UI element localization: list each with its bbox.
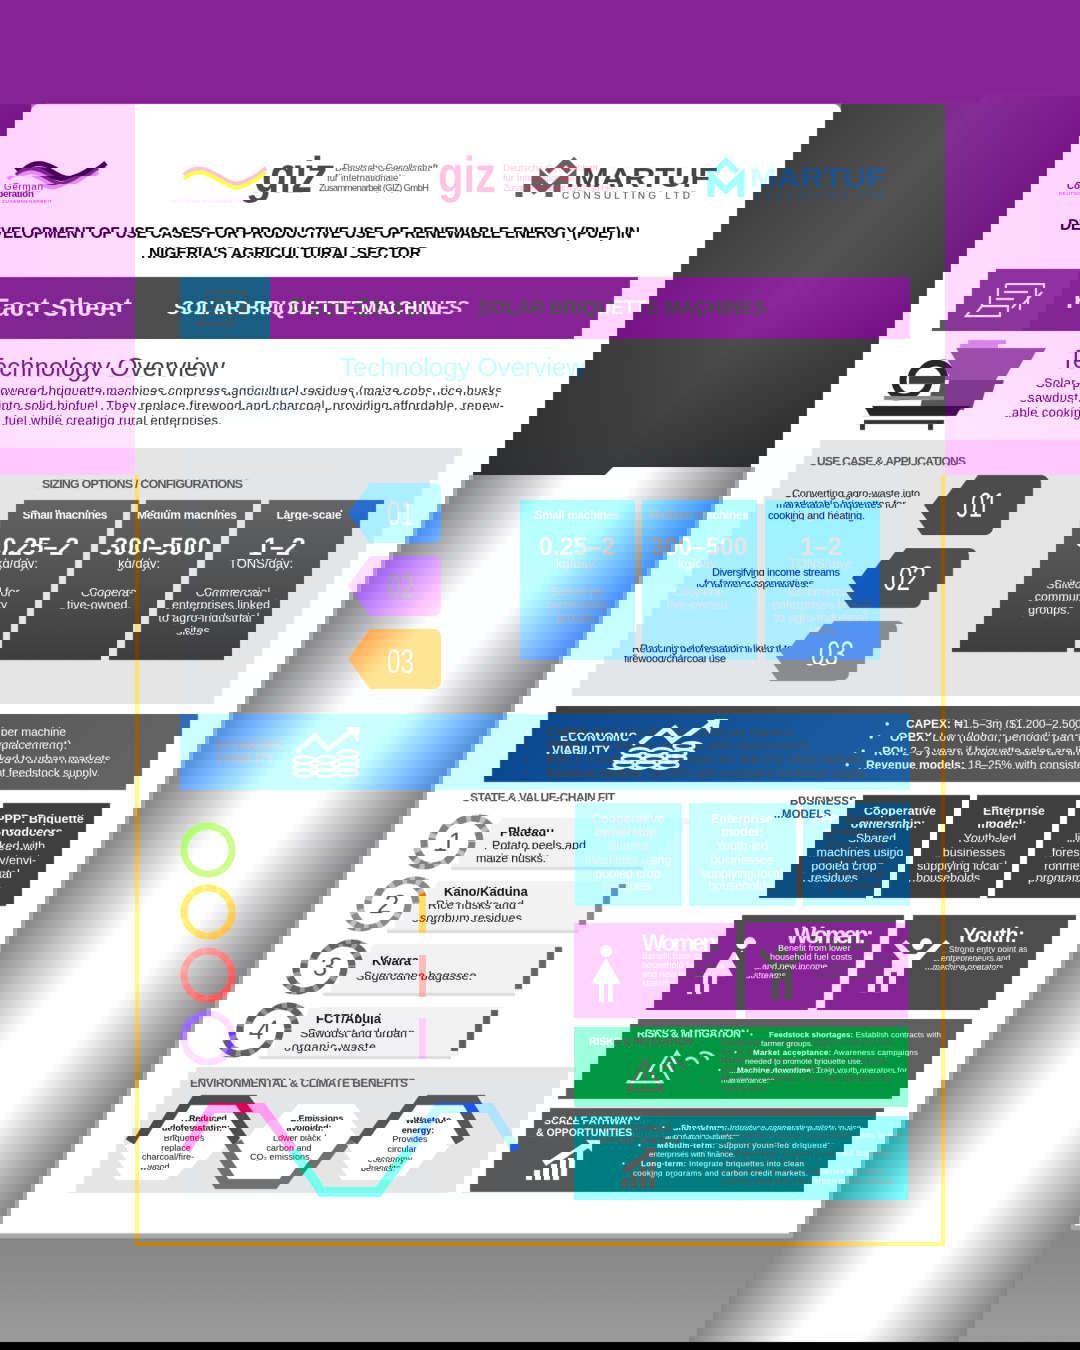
technology overview text: Solar-powered briquette machines compress agricultural residues (maize cobs, rice husks, — [340, 383, 890, 398]
title: NIGERIA'S AGRICULTURAL SECTOR — [397, 245, 669, 262]
use case 1 — [200, 483, 441, 543]
heading: SIZING OPTIONS / CONFIGURATIONS — [522, 477, 723, 491]
card: cooperative ownership: machines using — [585, 853, 671, 867]
header bar: fact sheet — [180, 277, 910, 339]
row: Plateau: Potato peels and — [252, 846, 346, 860]
row: FCT/Abuja: FCT/Abuja — [252, 1019, 318, 1034]
icon: coins and rising arrow — [294, 727, 360, 776]
hexagon: waste-to-energy: energy: — [450, 1133, 482, 1143]
panel: economic viability: VIABILITY — [216, 751, 274, 765]
icon: bars and arrow — [622, 1148, 656, 1188]
card: enterprise model: Youth-led — [716, 839, 768, 853]
icon: woman — [591, 945, 621, 1002]
bullet list: farmer groups. — [721, 1047, 773, 1056]
card: women: streams. — [642, 978, 677, 988]
hexagon: emissions avoided: CO₂ emissions. — [322, 1160, 384, 1170]
heading: MODELS — [510, 817, 560, 829]
card: large scale: to agro-industrial — [774, 611, 868, 625]
bullet list — [525, 725, 868, 780]
fact sheet heading: Fact Sheet — [290, 294, 429, 322]
logo: GIZ: giz — [438, 147, 496, 203]
bullet list: needed to promote briquette use. — [721, 1065, 839, 1074]
bullet list: • — [525, 725, 529, 739]
card: medium machines: 300–500 — [650, 533, 748, 561]
card: women: Benefit from lower — [642, 951, 715, 961]
panel: scale pathway and opportunities: & OPPORTUNITIES — [584, 1135, 680, 1147]
card: youth: entrepreneurs and — [813, 961, 883, 971]
card: large scale — [765, 500, 880, 660]
card: small machines: Suited for — [550, 585, 604, 599]
hexagon: waste-to-energy: circular — [451, 1152, 481, 1162]
panel: use case and sizing background — [180, 448, 910, 704]
hexagon: waste-to-energy: Waste-to- — [446, 1123, 486, 1133]
row: FCT/Abuja: organic waste — [252, 1048, 336, 1062]
bullet list: Revenue models: 18–25% with consistent feedstock supply. — [546, 766, 868, 780]
card: medium machines: tive-owned. — [667, 598, 731, 612]
bullet list — [702, 1131, 904, 1186]
use case 2: 02 — [387, 568, 414, 606]
row: FCT/Abuja: 4 — [201, 1023, 215, 1053]
card: cooperative ownership: Shared — [608, 839, 648, 853]
heading: USE CASE & APPLICATIONS — [193, 462, 342, 476]
icon: youth person — [758, 946, 806, 1000]
row: Kano/Kaduna: Kano/Kaduna — [252, 892, 337, 907]
card: enterprise model — [689, 803, 796, 906]
logo: Martuf Consulting — [711, 161, 886, 202]
machine name: SOLAR BRIQUETTE MACHINES — [478, 298, 766, 319]
card: PPP — [803, 803, 910, 906]
use case 2: Diversifying income streams — [200, 575, 328, 587]
card: large scale: Large-scale — [788, 508, 854, 522]
use case 3 — [200, 629, 441, 689]
use case 1: cooking and heating. — [200, 518, 297, 530]
row: Kwara: Sugarcane bagasse. — [252, 977, 368, 991]
title — [204, 225, 864, 262]
hexagon: emissions avoided: Lower black — [329, 1141, 378, 1151]
icon: document and pen — [198, 292, 250, 324]
card: PPP: linked with — [827, 839, 885, 853]
row: Kano/Kaduna — [184, 888, 427, 941]
hexagon: emissions avoided: Emissions — [330, 1121, 376, 1131]
card: women: and new income — [642, 969, 708, 979]
technology overview text — [340, 383, 904, 428]
bullet list: • — [702, 1056, 705, 1065]
bullet list: Feedstock shortages: Establish contracts with — [721, 1038, 893, 1047]
card: cooperative ownership: ownership: — [595, 825, 661, 839]
panel: scale pathway and opportunities — [574, 1116, 908, 1200]
bullet list: • — [702, 1074, 705, 1083]
row: Kwara: 3 — [201, 960, 215, 990]
bullet list — [702, 1038, 893, 1093]
hexagon: emissions avoided: avoided: — [334, 1131, 372, 1141]
card: PPP: ronmental — [828, 867, 884, 881]
bullet list: • — [702, 1167, 705, 1176]
hexagon: reduced deforestation: Briquettes — [220, 1141, 261, 1151]
bullet list: • — [702, 1149, 705, 1158]
card: large scale: Commercial — [788, 585, 854, 599]
row: Kwara: Kwara — [252, 961, 292, 976]
panel: business models — [510, 803, 910, 906]
panel: sizing options — [520, 477, 880, 660]
hexagon: reduced deforestation: charcoal/fire- — [214, 1160, 266, 1170]
bullet list: OPEX: Low (labour, periodic part replacement). — [546, 738, 811, 752]
panel: environmental and climate benefits — [180, 1075, 560, 1201]
panel: economic viability — [180, 714, 910, 790]
hexagon: reduced deforestation: Reduced — [221, 1121, 259, 1131]
hexagon: waste-to-energy — [409, 1108, 516, 1188]
row: Plateau: Plateau — [252, 832, 298, 847]
card: enterprise model: Enterprise — [711, 812, 773, 826]
white poster card — [135, 104, 945, 1246]
use case 1: marketable briquettes for — [200, 507, 322, 519]
bullet list: Market acceptance: Awareness campaigns — [721, 1056, 886, 1065]
hexagon: reduced deforestation — [186, 1108, 293, 1188]
card: youth: Youth: — [811, 932, 873, 955]
bullet list: CAPEX: ₦1.5–3m ($1,200–2,500) per machine — [546, 725, 794, 739]
card: cooperative ownership: pooled crop — [595, 867, 661, 881]
icon: warning triangle — [628, 1060, 684, 1090]
card: youth: Strong entry point as — [813, 952, 891, 962]
card: cooperative ownership: Cooperative — [592, 812, 664, 826]
card: small machines: Small machines — [534, 508, 620, 522]
card: cooperative ownership: residues. — [603, 879, 653, 893]
card: PPP: programs. — [828, 879, 884, 893]
logo: GIZ: Deutsche Gesellschaft — [503, 163, 598, 174]
card: PPP: producers — [825, 825, 887, 839]
card: medium machines: Coopera- — [673, 585, 725, 599]
bullet list: • — [702, 1038, 705, 1047]
card: large scale: sites — [808, 624, 834, 638]
technology overview text: able cooking fuel while creating rural enterprises. — [340, 413, 638, 428]
card: large scale: TONS/day; — [789, 556, 853, 571]
bullet list: • — [525, 752, 529, 766]
card: medium machines: Medium machines — [649, 508, 749, 522]
logo: GIZ: für Internationale — [503, 173, 574, 184]
panel: risks and mitigation — [574, 1027, 908, 1107]
heading: STATE & VALUE-CHAIN FIT — [182, 798, 328, 812]
card: youth: machine operators. — [813, 970, 886, 980]
bullet list: ROI: 2–3 years if briquette sales are linked to urban markets. — [546, 752, 866, 766]
use case 1: 01 — [387, 495, 414, 533]
hexagon: emissions avoided: carbon and — [330, 1151, 376, 1161]
logo: Martuf Consulting: CONSULTING LTD — [754, 191, 882, 202]
heading: ENVIRONMENTAL & CLIMATE BENEFITS — [190, 1084, 408, 1098]
bullet list: cooking programs and carbon credit markets. — [721, 1177, 896, 1186]
row: FCT/Abuja — [184, 1014, 427, 1067]
use case 2 — [200, 556, 441, 616]
card: youth — [745, 923, 908, 1018]
logo: German Cooperation: German — [188, 182, 227, 193]
row: Plateau — [184, 826, 427, 878]
use case 3: 03 — [387, 643, 414, 681]
use case 3: firewood/charcoal use — [200, 661, 302, 673]
bullet list: maintenance. — [721, 1084, 769, 1093]
hexagon: emissions avoided — [293, 1112, 409, 1192]
picture: briquette machine — [192, 348, 310, 438]
heading: RISKS & MITIGATION — [589, 1036, 693, 1048]
row: Plateau: maize husks. — [252, 859, 322, 873]
hexagon: waste-to-energy: Provides — [448, 1142, 484, 1152]
card: medium machines: kg/day; — [678, 556, 720, 571]
card: enterprise model: supplying local — [701, 867, 783, 881]
use case 2: for farmer cooperatives. — [200, 586, 313, 598]
technology overview heading: Technology Overview — [340, 352, 585, 382]
heading: ECONOMIC — [216, 738, 285, 752]
technology overview text: sawdust, into solid biofuel. They replace firewood and charcoal, providing affordable, renew- — [340, 398, 904, 413]
bullet list: Long-term: Integrate briquettes into clean — [721, 1167, 884, 1176]
heading: BUSINESS — [510, 804, 569, 816]
row: Kano/Kaduna: Rice husks and — [252, 906, 340, 920]
logo: GIZ: Zusammenarbeit (GIZ) GmbH — [503, 183, 613, 194]
logo: Martuf Consulting: MARTUF — [750, 163, 886, 193]
row: Plateau: 1 — [201, 835, 215, 865]
card: small machines: 0.25–2 — [539, 533, 615, 561]
card: large scale: enterprises linked — [772, 598, 870, 612]
card: PPP: forestry/envi- — [820, 853, 892, 867]
bullet list: Machine downtime: Train youth operators for — [721, 1074, 891, 1083]
row: Kwara — [184, 951, 427, 1004]
card: cooperative ownership — [575, 803, 682, 906]
hexagon: reduced deforestation: replace — [225, 1151, 255, 1161]
row: FCT/Abuja: Sawdust and urban — [252, 1034, 359, 1048]
logo: German Cooperation: Cooperation — [171, 189, 226, 200]
title: DEVELOPMENT OF USE CASES FOR PRODUCTIVE USE OF RENEWABLE ENERGY (PUE) IN — [204, 225, 864, 242]
bullet list: enterprises with finance. — [721, 1158, 807, 1167]
card: small machines: groups. — [556, 611, 598, 625]
bullet list: Medium-term: Support youth-led briquette — [721, 1149, 892, 1158]
heading — [510, 804, 569, 829]
card: small machines: kg/day; — [556, 556, 598, 571]
hexagon: waste-to-energy: economy — [448, 1162, 485, 1172]
hexagon: reduced deforestation: wood. — [227, 1170, 252, 1180]
use case 3: Reducing deforestation linked to — [200, 651, 353, 663]
hexagon: reduced deforestation: deforestation: — [210, 1131, 270, 1141]
card: enterprise model: businesses — [711, 853, 773, 867]
bullet list: Short-term: Introduce cooperative pilots in rice- — [721, 1131, 904, 1140]
card: small machines: community — [547, 598, 608, 612]
card: women: household fuel costs — [642, 960, 725, 970]
row: Kano/Kaduna: 2 — [201, 897, 215, 927]
panel: state and value-chain fit — [182, 798, 427, 1067]
bullet list: • — [525, 738, 529, 752]
card: large scale: 1–2 — [800, 533, 842, 561]
card: enterprise model: model: — [722, 825, 762, 839]
hexagon: waste-to-energy: benefits. — [449, 1171, 483, 1181]
card: small machines — [520, 500, 635, 660]
panel: use case and applications — [193, 462, 441, 689]
card: PPP: PPP: Briquette — [812, 812, 900, 826]
bullet list: • — [702, 1131, 705, 1140]
heading: SCALE PATHWAY — [584, 1123, 672, 1135]
row: Kano/Kaduna: sorghum residues — [252, 919, 354, 933]
card: medium machines — [642, 500, 757, 660]
card: women: Women: — [642, 930, 722, 957]
use case 1: Converting agro-waste into — [200, 496, 328, 508]
logo: German Cooperation — [171, 163, 266, 205]
bullet list: and maize clusters. — [721, 1140, 790, 1149]
bullet list: • — [525, 766, 529, 780]
card: women — [574, 923, 736, 1018]
logo: GIZ — [438, 147, 613, 203]
logo: German Cooperation: DEUTSCHE ZUSAMMENARBEIT — [171, 199, 252, 205]
card: enterprise model: households. — [708, 879, 776, 893]
